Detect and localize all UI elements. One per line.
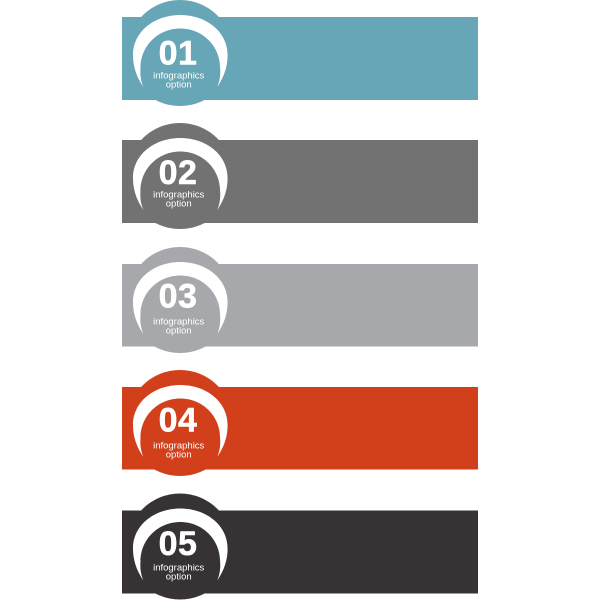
- panel: option 04: [122, 370, 478, 476]
- band 03: [122, 264, 478, 346]
- badge circle 05: [127, 494, 233, 600]
- number 01: 01: [159, 34, 197, 72]
- number 03: 03: [159, 278, 197, 316]
- label 02: [153, 190, 205, 210]
- band 05: [122, 510, 478, 594]
- badge circle 02: [127, 123, 233, 229]
- label 03: infographics: [153, 316, 205, 328]
- band 02: [122, 140, 478, 223]
- panel: option 03: [122, 247, 478, 353]
- label 03: [153, 316, 205, 336]
- label 02: infographics: [153, 190, 205, 200]
- label 02: option: [166, 198, 192, 210]
- crescent 05: [133, 508, 228, 580]
- number 04: 04: [159, 402, 197, 440]
- label 05: [153, 562, 205, 582]
- label 01: infographics: [153, 70, 205, 82]
- band 01: [122, 17, 478, 100]
- number 05: 05: [159, 525, 197, 563]
- crescent 04: [133, 385, 228, 457]
- panel: option 02: [122, 123, 478, 229]
- label 04: option: [166, 450, 192, 460]
- crescent 01: [133, 15, 228, 87]
- label 04: [153, 440, 205, 460]
- label 04: infographics: [153, 440, 205, 452]
- label 01: option: [166, 80, 192, 90]
- crescent 03: [133, 262, 228, 334]
- badge circle 01: [127, 0, 233, 106]
- label 03: option: [166, 326, 192, 336]
- number 02: 02: [159, 154, 197, 192]
- label 05: option: [166, 572, 192, 582]
- label 05: infographics: [153, 562, 205, 574]
- badge circle 03: [127, 247, 233, 353]
- panel: option 05: [122, 494, 478, 600]
- band 04: [122, 387, 478, 470]
- badge circle 04: [127, 370, 233, 476]
- crescent 02: [133, 138, 228, 210]
- panel: option 01: [122, 0, 478, 106]
- label 01: [153, 70, 205, 90]
